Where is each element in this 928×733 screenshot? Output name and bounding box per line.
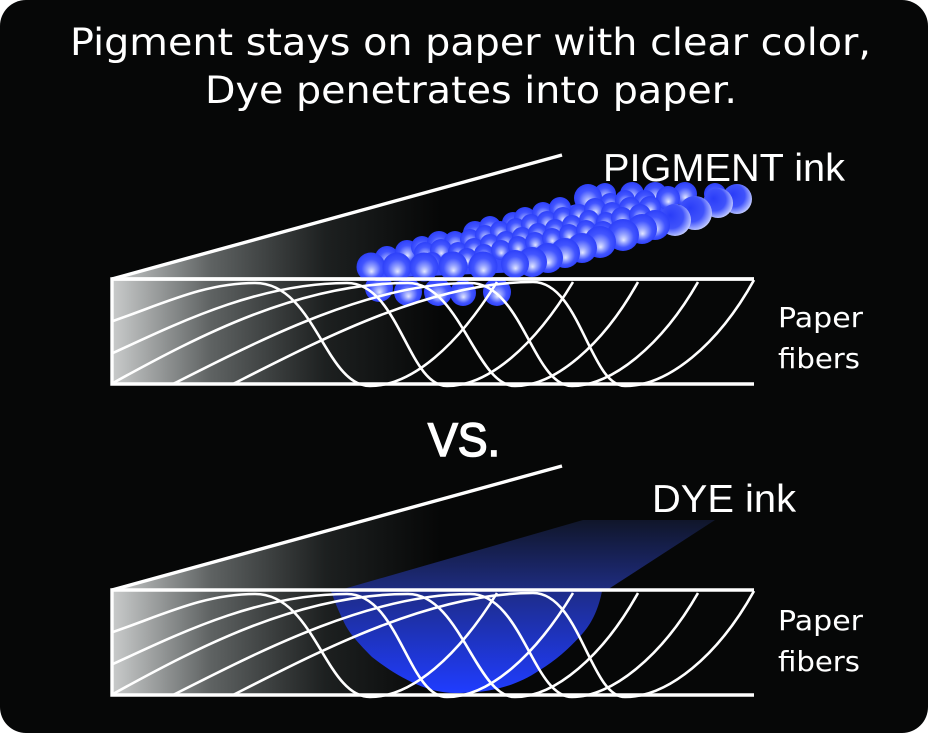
dye soaked area: [331, 591, 602, 693]
paper fibers: [113, 591, 754, 697]
label: paper fibers: Paper: [778, 301, 864, 334]
panel: dye ink on paper: [112, 466, 864, 697]
pigment particles on the surface: [356, 182, 752, 282]
title: [70, 21, 871, 112]
dye beam above paper: [340, 520, 715, 590]
label: paper fibers: [778, 604, 864, 678]
slanted back edge: [112, 155, 562, 279]
paper outline: [112, 279, 754, 384]
title: Dye penetrates into paper.: [205, 69, 737, 112]
slanted back edge: [112, 466, 562, 590]
label: dye ink: DYE ink: [652, 478, 797, 521]
label: paper fibers: fibers: [778, 342, 860, 375]
paper top edge over particles: [112, 277, 754, 281]
pigment particles below the surface: [365, 274, 511, 306]
paper top surface: [112, 466, 562, 590]
paper outline: [112, 590, 754, 695]
title: Pigment stays on paper with clear color,: [70, 21, 871, 64]
label: paper fibers: Paper: [778, 604, 864, 637]
paper fibers: [113, 280, 754, 386]
panel: pigment ink on paper: [112, 147, 864, 386]
label: paper fibers: fibers: [778, 645, 860, 678]
paper front face: [112, 279, 754, 384]
label: pigment ink: PIGMENT ink: [603, 147, 846, 190]
paper front face: [112, 590, 754, 695]
label: paper fibers: [778, 301, 864, 375]
vs. label: VS.: [428, 413, 500, 466]
paper top surface: [112, 155, 562, 279]
